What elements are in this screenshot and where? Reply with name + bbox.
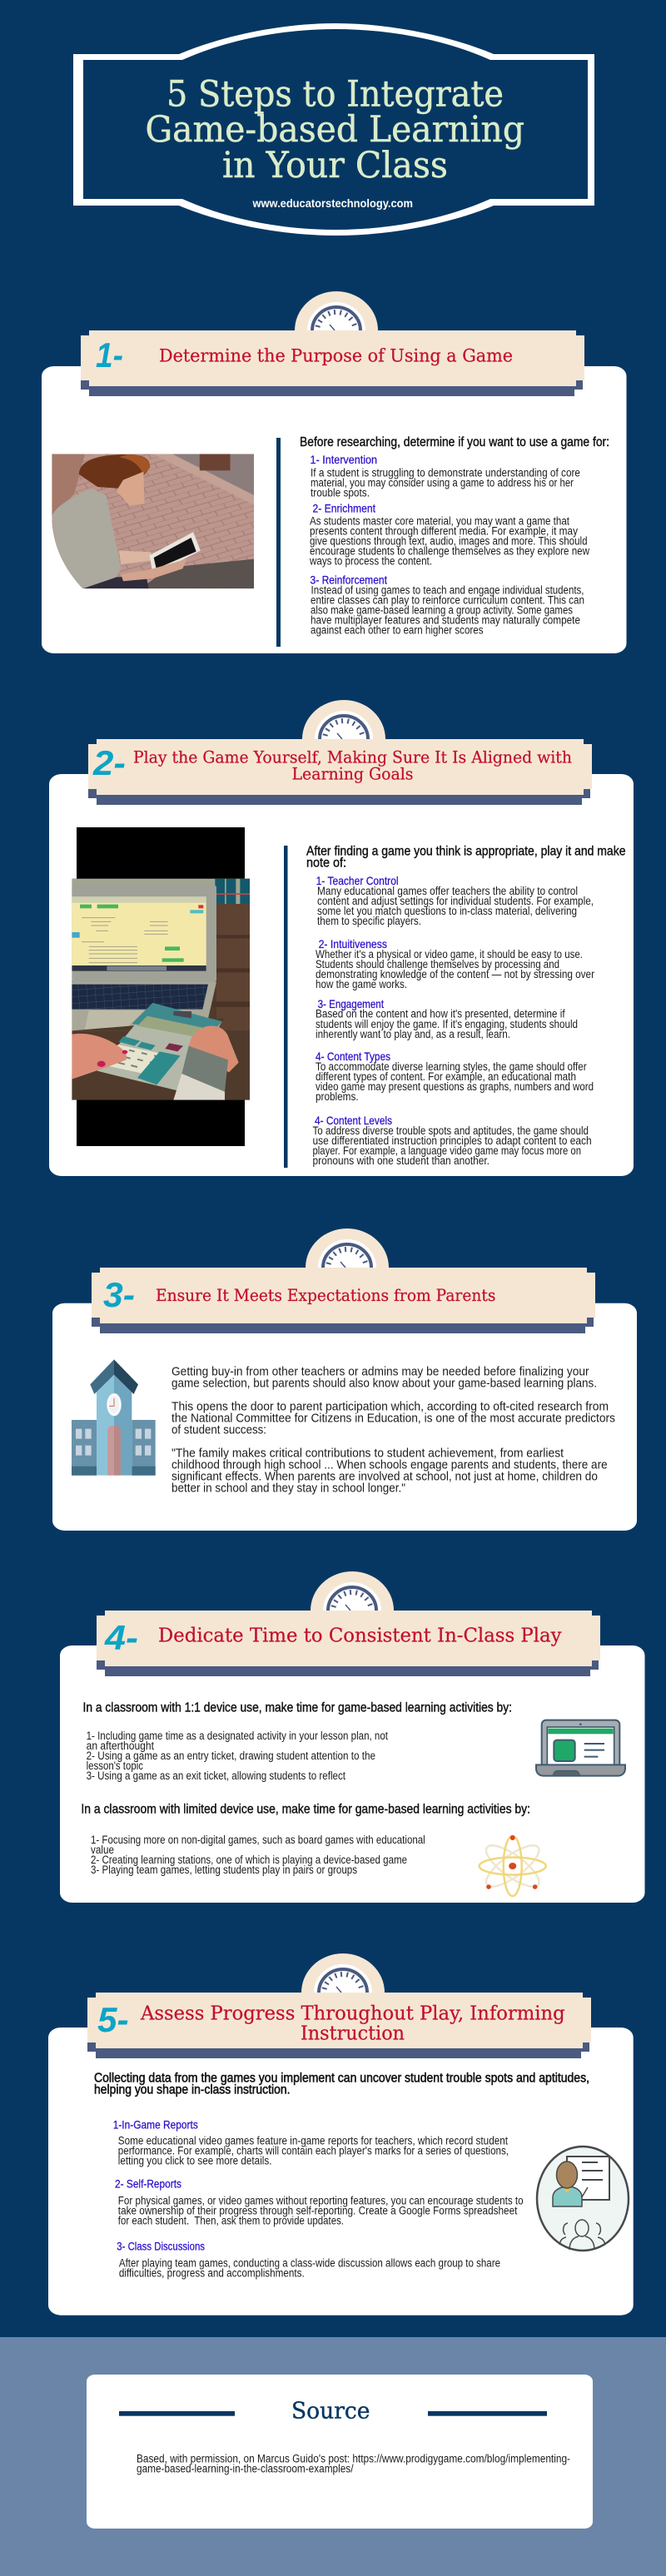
- text block: use differentiated instruction principles to adapt content to each: [313, 1134, 592, 1147]
- text block: Students should challenge themselves by processing and: [316, 958, 559, 970]
- text block: 1:1 device use: 1- Including game time as a designated activity in your lesson plan, not: [87, 1730, 388, 1742]
- text block: better in school and they stay in school longer.": [171, 1482, 405, 1496]
- text block: This opens the door to parent participation which, according to oft-cited research from: [171, 1400, 609, 1414]
- text block: Some educational video games feature in-game reports for teachers, which record student: [118, 2134, 508, 2147]
- icon: school building: [72, 1359, 156, 1476]
- icon: clock dome: [301, 1953, 385, 1993]
- icon: clock dome: [311, 1571, 394, 1611]
- text block: different types of content. For example, an educational math: [316, 1070, 576, 1083]
- footer background: [0, 2337, 666, 2576]
- card background: [52, 1303, 637, 1531]
- text block: demonstrating knowledge of the content — not by stressing over: [316, 968, 594, 980]
- text block: take ownership of their progress through self-reporting. Create a Google Forms spreadsheet: [118, 2205, 518, 2217]
- text block: 1-In-Game Reports: [113, 2118, 198, 2132]
- text block: Based on the content and how it's presented, determine if: [316, 1008, 565, 1020]
- text block: "The family makes critical contributions to student achievement, from earliest: [171, 1447, 564, 1461]
- text block: ways to process the content.: [309, 555, 432, 568]
- heading left rule: [119, 2411, 235, 2416]
- heading: Assess Progress Throughout Play, Informing: [140, 2003, 565, 2025]
- text block: some let you match questions to in-class material, delivering: [317, 905, 577, 917]
- text block: Getting buy-in from other teachers or admins may be needed before finalizing your: [171, 1365, 589, 1379]
- icon: clock dome: [295, 291, 378, 330]
- photo: laptop and calculator: [72, 827, 250, 1146]
- heading: [133, 747, 572, 784]
- text block: 2- Enrichment: [313, 502, 375, 515]
- text block: 1:1 device use: [83, 1701, 512, 1782]
- title: in Your Class: [222, 145, 448, 186]
- text block: 1:1 device use: 2- Using a game as an entry ticket, drawing student attention to the: [87, 1750, 375, 1762]
- text block: limited device use: value: [91, 1844, 114, 1856]
- heading: Determine the Purpose of Using a Game: [159, 346, 513, 366]
- panel: step 5: [48, 1953, 634, 2315]
- text block: letting you click to see more details.: [118, 2154, 271, 2167]
- text block: 1- Intervention: [310, 453, 377, 466]
- text block: 3- Class Discussions: [117, 2240, 205, 2253]
- banner frame: [73, 23, 594, 236]
- text block: To address diverse trouble spots and aptitudes, the game should: [313, 1124, 589, 1137]
- text block: of student success:: [171, 1423, 266, 1437]
- text block: [306, 844, 626, 1167]
- text block: 1:1 device use: In a classroom with 1:1 device use, make time for game-based learning activities by:: [83, 1701, 512, 1715]
- text block: pronouns with one student than another.: [313, 1154, 490, 1167]
- text block: limited device use: 1- Focusing more on non-digital games, such as board games with educational: [91, 1834, 425, 1846]
- text block: difficulties, progress and accomplishments.: [119, 2267, 305, 2280]
- step number: 4-: [104, 1618, 138, 1657]
- step ribbon: [97, 1611, 600, 1676]
- step ribbon: [88, 739, 592, 805]
- heading: Play the Game Yourself, Making Sure It Is Aligned with: [133, 747, 572, 767]
- text block: also make game-based learning a group activity. Some games: [311, 604, 573, 617]
- text block: Before researching, determine if you want to use a game for:: [300, 435, 609, 449]
- icon: clock dome: [302, 700, 385, 739]
- source text: [137, 2453, 570, 2475]
- photo: woman with tablet: [52, 454, 254, 588]
- text block: 1:1 device use: an afterthought: [87, 1740, 154, 1752]
- text block: game selection, but parents should also know about your game-based learning plans.: [171, 1377, 597, 1391]
- text block: presents content through different media. For example, it may: [310, 525, 578, 538]
- text block: note of:: [306, 856, 346, 871]
- text block: have multiplayer features and students may naturally compete: [311, 614, 580, 627]
- card background: [49, 774, 634, 1176]
- source text: Based, with permission, on Marcus Guido's post: https://www.prodigygame.com/blog/implementing-: [137, 2453, 570, 2465]
- text block: Instead of using games to teach and engage individual students,: [311, 584, 584, 597]
- text block: students will enjoy the game. If it's engaging, students should: [316, 1018, 578, 1030]
- text block: limited device use: 2- Creating learning stations, one of which is playing a device-based game: [91, 1854, 407, 1866]
- icon: teacher and students: [537, 2147, 629, 2251]
- text block: 1- Teacher Control: [316, 874, 399, 887]
- text block: After finding a game you think is appropriate, play it and make: [306, 844, 626, 859]
- title: Game-based Learning: [145, 109, 524, 151]
- text block: significant effects. When parents are involved at school, not just at home, children do: [171, 1470, 598, 1484]
- text block: trouble spots.: [311, 486, 370, 499]
- heading: source: Source: [291, 2399, 370, 2425]
- step ribbon: [87, 1993, 591, 2058]
- text block: encourage students to challenge themselves as they explore new: [310, 545, 589, 558]
- step number: 3-: [103, 1275, 135, 1314]
- text block: 1:1 device use: 3- Using a game as an exit ticket, allowing students to reflect: [87, 1769, 345, 1782]
- text block: helping you shape in-class instruction.: [94, 2083, 290, 2097]
- panel: step 4: [60, 1571, 644, 1903]
- text block: Collecting data from the games you implement can uncover student trouble spots and aptitudes,: [94, 2072, 589, 2086]
- step number: 5-: [97, 2000, 129, 2039]
- panel: step 3: [52, 1228, 637, 1531]
- heading right rule: [428, 2411, 547, 2416]
- panel: source: [87, 2375, 593, 2529]
- icon: clock dome: [306, 1228, 389, 1268]
- text block: 3- Reinforcement: [310, 573, 387, 587]
- divider bar: [284, 846, 288, 1168]
- card background: [87, 2375, 593, 2529]
- text block: 2- Self-Reports: [115, 2177, 181, 2191]
- card background: [42, 366, 626, 653]
- card background: [60, 1645, 644, 1903]
- title banner: [73, 23, 594, 236]
- text block: player. For example, a language video game may focus more on: [313, 1144, 581, 1157]
- step number: 1-: [96, 335, 123, 375]
- text block: To accommodate diverse learning styles, the game should offer: [316, 1060, 587, 1073]
- panel: step 1: [42, 291, 626, 653]
- text block: Whether it's a physical or video game, it should be easy to use.: [316, 948, 583, 960]
- heading: Instruction: [301, 2023, 405, 2045]
- text block: for each student. Then, ask them to provide updates.: [118, 2215, 344, 2227]
- text block: limited device use: 3- Playing team games, letting students play in pairs or groups: [91, 1864, 357, 1876]
- text block: 4- Content Levels: [315, 1114, 392, 1127]
- text block: problems.: [316, 1090, 359, 1103]
- text block: 2- Intuitiveness: [319, 937, 387, 950]
- text block: Many educational games offer teachers the ability to control: [317, 885, 578, 897]
- text block: material, you may consider using a game to address his or her: [311, 476, 574, 489]
- step ribbon: [81, 330, 584, 396]
- text block: video game may present questions as graphs, numbers and word: [316, 1080, 594, 1093]
- text block: give questions through text, audio, images and more. This should: [310, 535, 588, 548]
- text block: how the game works.: [316, 978, 407, 990]
- text block: content and adjust settings for individual students. For example,: [317, 895, 594, 907]
- text block: the National Committee for Citizens in Education, is one of the most accurate predictors: [171, 1412, 615, 1426]
- text block: If a student is struggling to demonstrate understanding of core: [311, 466, 580, 479]
- icon: atom: [480, 1835, 546, 1896]
- panel: step 2: [49, 700, 634, 1176]
- text block: After playing team games, conducting a class-wide discussion allows each group to share: [119, 2257, 500, 2270]
- card background: [48, 2028, 634, 2315]
- website url: www.educatorstechnology.com: [252, 197, 413, 210]
- text block: performance. For example, charts will contain each player's marks for a series of questions,: [118, 2144, 509, 2157]
- text block: entire classes can play to reinforce curriculum content. This can: [311, 594, 584, 607]
- heading: [140, 2003, 565, 2045]
- text block: inherently want to play and, as a result, learn.: [316, 1028, 510, 1040]
- text block: 3- Engagement: [318, 997, 384, 1010]
- text block: [300, 435, 609, 637]
- heading: Ensure It Meets Expectations from Parents: [156, 1285, 495, 1305]
- text block: against each other to earn higher scores: [311, 624, 484, 637]
- text block: 4- Content Types: [316, 1050, 390, 1063]
- heading: Dedicate Time to Consistent In-Class Play: [158, 1626, 562, 1647]
- text block: limited device use: [81, 1803, 530, 1876]
- text block: them to specific players.: [317, 915, 421, 927]
- text block: 1:1 device use: lesson's topic: [87, 1760, 143, 1772]
- text block: As students master core material, you may want a game that: [310, 515, 569, 528]
- step ribbon: [92, 1268, 595, 1333]
- divider bar: [276, 438, 281, 647]
- text block: [94, 2072, 589, 2280]
- source text: game-based-learning-in-the-classroom-examples/: [137, 2463, 354, 2475]
- text block: childhood through high school ... When schools engage parents and students, there are: [171, 1458, 608, 1472]
- heading: Learning Goals: [291, 764, 413, 784]
- title: [145, 73, 524, 186]
- text block: For physical games, or video games without reporting features, you can encourage students to: [118, 2195, 524, 2207]
- text block: [171, 1365, 615, 1496]
- title: 5 Steps to Integrate: [166, 73, 504, 115]
- step number: 2-: [92, 743, 126, 782]
- icon: laptop: [536, 1720, 625, 1776]
- text block: limited device use: In a classroom with limited device use, make time for game-based learning activities by:: [81, 1803, 530, 1817]
